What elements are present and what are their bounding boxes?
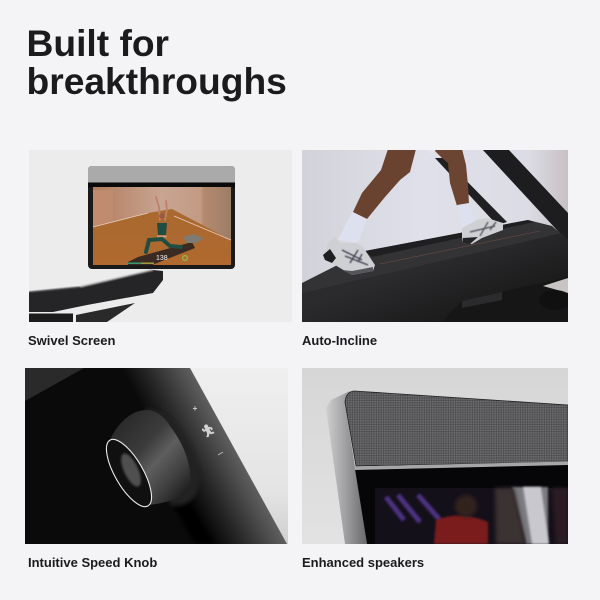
treadmill rails bbox=[435, 149, 568, 242]
icon: screen device bbox=[88, 166, 235, 269]
workout video bbox=[93, 187, 231, 265]
label: enhanced speakers: Enhanced speakers bbox=[302, 555, 424, 570]
title bbox=[26, 22, 287, 102]
machine body bbox=[25, 368, 287, 544]
treadmill deck bbox=[302, 220, 571, 322]
speed controls: + bbox=[193, 404, 198, 413]
runner legs bbox=[338, 149, 476, 243]
speed controls: 🏃︎ bbox=[200, 424, 216, 438]
workout metric: 138 bbox=[156, 255, 168, 262]
panel: auto-incline bbox=[302, 149, 571, 322]
device frame bbox=[326, 391, 367, 544]
panel: enhanced speakers bbox=[302, 368, 568, 544]
label: intuitive speed knob: Intuitive Speed Knob bbox=[28, 555, 157, 570]
speaker fabric bbox=[345, 391, 568, 466]
speed controls bbox=[193, 404, 223, 455]
title: breakthroughs bbox=[26, 60, 287, 102]
speed knob bbox=[106, 410, 190, 508]
yoga figure bbox=[146, 197, 181, 252]
knob base bbox=[145, 408, 200, 506]
panel: intuitive speed knob bbox=[25, 368, 288, 544]
shoes bbox=[323, 218, 503, 275]
screen bezel bbox=[354, 462, 568, 544]
screen video bbox=[375, 487, 568, 544]
panel: swivel screen bbox=[29, 150, 292, 322]
label: swivel screen: Swivel Screen bbox=[28, 333, 115, 348]
icon: handlebar bbox=[29, 270, 163, 322]
label: auto-incline: Auto-Incline bbox=[302, 333, 377, 348]
title: Built for bbox=[26, 22, 169, 64]
